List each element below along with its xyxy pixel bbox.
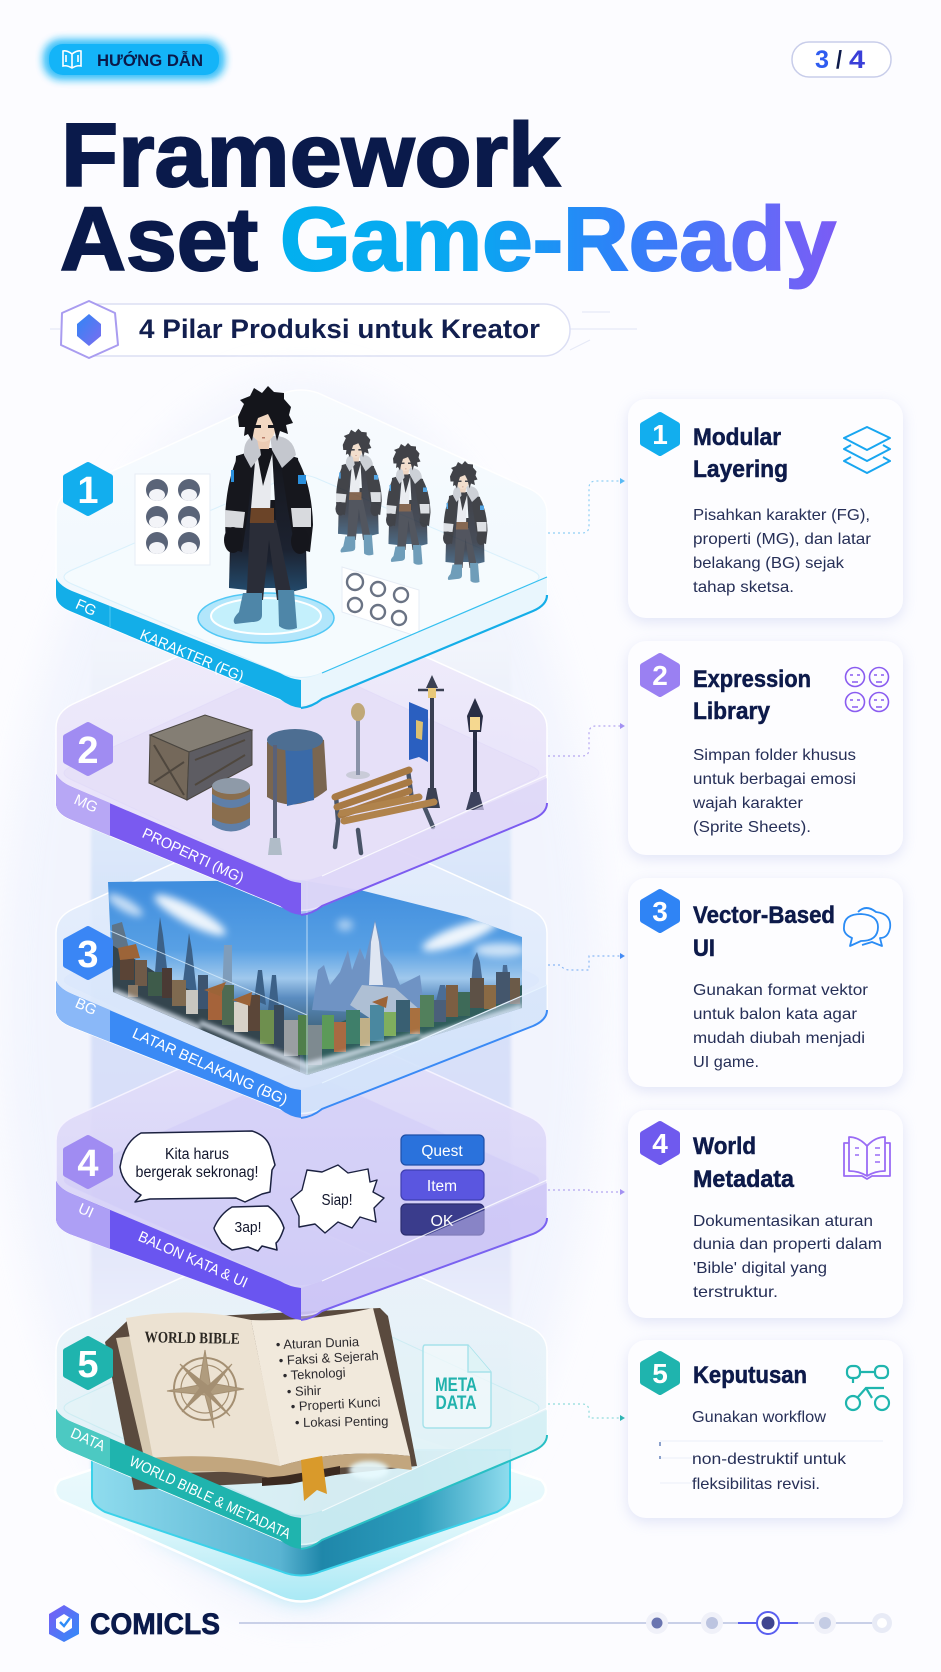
badge: number 1 <box>66 465 110 513</box>
title: Aset <box>60 190 258 290</box>
icon: open book <box>844 1137 890 1179</box>
badge: number 4 <box>66 1138 110 1186</box>
list: bible topics <box>276 1334 388 1430</box>
icon: gem hexagon <box>61 301 118 358</box>
ui buttons <box>401 1135 484 1235</box>
card 3: vector-based ui: UI game. <box>693 1054 759 1071</box>
card 2: expression library: Simpan folder khusus <box>693 747 856 764</box>
illustration: distant lamp <box>346 703 370 779</box>
illustration: lamp post <box>466 698 484 810</box>
icon: meta data file <box>423 1345 491 1428</box>
illustration: crate <box>149 715 252 800</box>
card 1: modular layering: tahap sketsa. <box>693 579 794 596</box>
card 1: modular layering: Pisahkan karakter (FG), <box>693 507 870 524</box>
panel: layer 1 characters <box>56 386 547 708</box>
panel: layer 2 properties <box>56 605 547 915</box>
page number pill <box>792 42 891 77</box>
subtitle pill <box>50 301 637 358</box>
card 5: keputusan: Keputusan <box>693 1362 807 1389</box>
card 4: world metadata: Metadata <box>693 1166 795 1193</box>
badge: number 4: 4 <box>77 1143 99 1185</box>
illustration: bound chest <box>267 729 327 806</box>
badge: number 3: 3 <box>77 934 99 976</box>
strip: data label: DATA <box>68 1425 108 1455</box>
hex number 3: 3 <box>652 896 668 927</box>
card 5: keputusan: fleksibilitas revisi. <box>692 1476 820 1493</box>
hex number 5 <box>643 1354 677 1392</box>
card 2: expression library: wajah karakter <box>692 795 804 812</box>
illustration: fantasy city panorama <box>100 875 530 1080</box>
connectors: layers to cards <box>548 478 625 1421</box>
strip: ui label: UI <box>76 1200 96 1222</box>
hex number 5: 5 <box>652 1358 668 1389</box>
badge: number 1: 1 <box>77 470 99 512</box>
badge: number 5: 5 <box>77 1344 99 1386</box>
hex number 3 <box>643 892 677 930</box>
badge: number 2 <box>66 725 110 773</box>
icon: meta data file: META <box>435 1375 477 1396</box>
speech bubble: kita harus <box>120 1131 275 1202</box>
character: front view <box>335 429 382 555</box>
town blocks <box>118 944 520 1065</box>
ui buttons: Quest <box>421 1143 463 1160</box>
title: Framework <box>61 106 561 206</box>
card 4: world metadata: World <box>693 1133 756 1160</box>
strip: bg label: LATAR BELAKANG (BG) <box>130 1025 290 1109</box>
speech bubble: small <box>214 1206 284 1251</box>
list: bible topics: • Teknologi <box>282 1365 346 1383</box>
badge: Hướng Dẫn <box>43 39 225 80</box>
list: bible topics: • Faksi & Sejerah <box>278 1348 379 1368</box>
card 4: world metadata: 'Bible' digital yang <box>693 1260 827 1277</box>
hex number 4: 4 <box>652 1128 668 1159</box>
panel: layer 4 balloons and ui <box>56 1018 547 1320</box>
list: bible topics: • Aturan Dunia <box>276 1334 360 1352</box>
card 1: modular layering: Layering <box>693 456 788 483</box>
card 4: world metadata: terstruktur. <box>693 1284 778 1301</box>
page number pill: 3 <box>815 46 829 74</box>
card 2: expression library: Library <box>693 698 771 725</box>
card 5: keputusan <box>628 1340 903 1518</box>
illustration: banner pole <box>409 675 444 808</box>
page number pill: 4 <box>849 46 865 74</box>
hex number 1: 1 <box>652 419 668 450</box>
badge: Hướng Dẫn: HƯỚNG DẪN <box>97 51 203 70</box>
speech bubble: kita harus: Kita harus <box>165 1146 229 1163</box>
strip: data label <box>56 1409 301 1549</box>
strip: fg label <box>56 578 301 708</box>
panel: layer 3 background <box>56 862 548 1119</box>
subtitle pill: 4 Pilar Produksi untuk Kreator <box>139 314 540 344</box>
strip: mg label <box>56 774 301 915</box>
speech bubble: spiky <box>291 1165 384 1233</box>
card 2: expression library: untuk berbagai emosi <box>693 771 856 788</box>
card 4: world metadata: dunia dan properti dalam <box>693 1236 882 1253</box>
strip: ui label <box>56 1181 301 1320</box>
illustration: short post <box>268 745 282 855</box>
badge: number 5 <box>66 1339 110 1387</box>
strip: data label: WORLD BIBLE & METADATA <box>127 1453 293 1543</box>
hex number 2 <box>643 656 677 694</box>
list: bible topics: • Lokasi Penting <box>295 1413 388 1430</box>
hex number 2: 2 <box>652 660 668 691</box>
glass front right <box>301 1410 547 1549</box>
panel: layer 5 world bible <box>56 1228 547 1549</box>
strip: mg label: PROPERTI (MG) <box>139 825 246 887</box>
glow ring <box>198 593 334 643</box>
card 1: modular layering <box>628 399 903 618</box>
hex number 1 <box>643 415 677 453</box>
strip: fg label: KARAKTER (FG) <box>137 626 246 685</box>
icon: workflow nodes <box>846 1366 889 1410</box>
speech bubble: spiky: Siap! <box>322 1192 352 1209</box>
strip: fg label: FG <box>73 596 99 620</box>
illustration: bench <box>335 770 434 853</box>
card 4: world metadata: Dokumentasikan aturan <box>693 1213 873 1230</box>
card 1: modular layering: belakang (BG) sejak <box>693 555 845 572</box>
ui buttons: Item <box>427 1178 457 1195</box>
strip: bg label: BG <box>72 995 99 1019</box>
page number pill: / <box>836 46 842 74</box>
illustration: barrel <box>212 778 250 832</box>
icon: layers <box>844 427 890 473</box>
progress dots <box>239 1612 892 1634</box>
speech bubble: small: 3ap! <box>234 1219 262 1236</box>
card 3: vector-based ui <box>628 878 903 1087</box>
speech bubble: kita harus: bergerak sekronag! <box>136 1164 258 1181</box>
hex number 4 <box>643 1124 677 1162</box>
card 3: vector-based ui: UI <box>693 935 715 962</box>
character: back view <box>443 461 488 583</box>
icon: open book <box>63 51 81 68</box>
icon: logo hexagon <box>49 1605 79 1642</box>
card 2: expression library <box>628 641 903 855</box>
badge: number 2: 2 <box>77 730 99 772</box>
footer logo <box>49 1605 220 1642</box>
list: bible topics: • Properti Kunci <box>290 1394 381 1414</box>
card 3: vector-based ui: mudah diubah menjadi <box>693 1030 865 1047</box>
card 2: expression library: (Sprite Sheets). <box>693 819 811 836</box>
card 3: vector-based ui: Gunakan format vektor <box>693 982 869 999</box>
card 3: vector-based ui: untuk balon kata agar <box>693 1006 858 1023</box>
strip: mg label: MG <box>71 791 100 817</box>
card 1: modular layering: properti (MG), dan latar <box>693 531 872 548</box>
icon: compass rose <box>167 1350 244 1428</box>
card 4: world metadata <box>628 1110 903 1318</box>
icon: speech bubbles <box>844 908 890 946</box>
card 2: expression library: Expression <box>693 666 811 693</box>
expression sheet: left <box>135 474 210 565</box>
expression sheet: right <box>342 567 419 637</box>
badge: number 3 <box>66 929 110 977</box>
title <box>60 106 836 290</box>
title: Game-Ready <box>280 190 836 290</box>
ui buttons: OK <box>430 1213 454 1230</box>
card 1: modular layering: Modular <box>693 424 781 451</box>
strip: bg label <box>56 981 301 1118</box>
book: world bible: WORLD BIBLE <box>144 1329 240 1348</box>
character: side view <box>386 443 430 565</box>
card 5: keputusan: non-destruktif untuk <box>692 1451 847 1468</box>
icon: meta data file: DATA <box>436 1393 477 1414</box>
base platform <box>55 1400 546 1602</box>
icon: four faces <box>846 668 888 712</box>
list: bible topics: • Sihir <box>287 1383 322 1399</box>
footer logo: COMICLS <box>90 1608 220 1641</box>
character: main hero <box>224 386 313 630</box>
stack: central column <box>1 380 601 1620</box>
strip: ui label: BALON KATA & UI <box>135 1228 250 1292</box>
card 3: vector-based ui: Vector-Based <box>693 902 835 929</box>
card 5: keputusan: Gunakan workflow <box>692 1409 826 1426</box>
book: world bible <box>105 1308 417 1501</box>
